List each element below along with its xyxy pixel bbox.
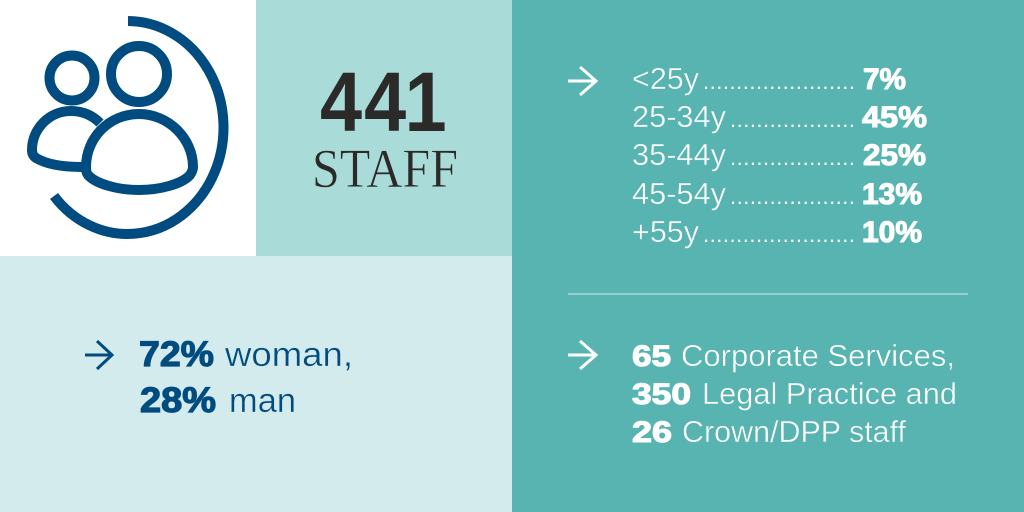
man label: man <box>229 382 296 420</box>
panel: icon background <box>0 0 256 256</box>
icon: group of people in arc <box>32 21 224 234</box>
department list: 350 <box>632 378 691 411</box>
total staff number: 441 <box>320 55 447 149</box>
arrow: age <box>568 67 596 95</box>
arrow: gender <box>85 341 112 369</box>
woman label: woman, <box>224 336 353 374</box>
age list: 45-54y <box>632 176 726 211</box>
department list: 65 <box>632 340 671 373</box>
age list: 25-34y <box>632 99 726 134</box>
age list: 13% <box>862 178 922 211</box>
man share: 28% <box>140 381 216 420</box>
department list <box>632 338 957 449</box>
age list: ................... <box>730 184 855 209</box>
age list: ....................... <box>703 69 855 94</box>
arrow: departments <box>568 341 596 369</box>
panel: staff total <box>256 0 512 256</box>
age list: ....................... <box>703 222 855 247</box>
panel: gender split <box>0 256 512 512</box>
panel: age and department breakdown <box>512 0 1024 512</box>
staff label: STAFF <box>312 138 458 199</box>
age list: ................... <box>730 145 855 170</box>
age list: 10% <box>862 216 922 249</box>
age list: 35-44y <box>632 137 726 172</box>
age list: 25% <box>863 139 926 172</box>
age list: <25y <box>632 61 699 96</box>
department list: Legal Practice and <box>702 376 957 411</box>
department list: Crown/DPP staff <box>682 414 906 449</box>
age list: 45% <box>862 101 927 134</box>
age list: ................... <box>730 107 855 132</box>
woman share: 72% <box>139 335 214 374</box>
age list: +55y <box>632 214 699 249</box>
department list: Corporate Services, <box>681 338 955 373</box>
age list: 7% <box>863 63 906 96</box>
department list: 26 <box>632 416 672 449</box>
age list <box>632 61 927 249</box>
